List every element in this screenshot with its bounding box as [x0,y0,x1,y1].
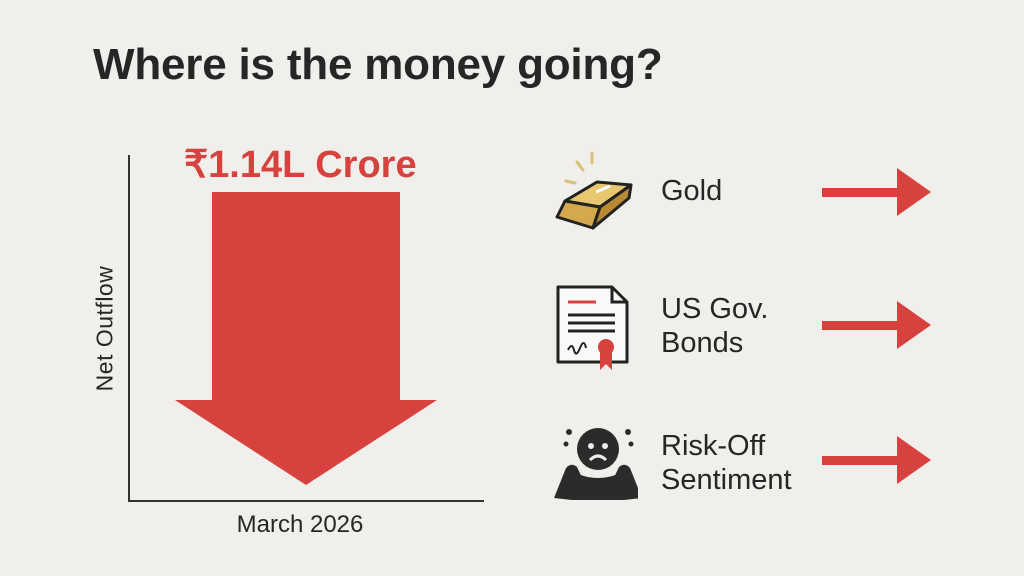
arrow: risk-off [822,436,931,484]
x axis label: March 2026 [237,511,363,538]
value label: ₹1.14L Crore [184,144,417,186]
label: US Gov. Bonds: Bonds [661,327,743,359]
title: Where is the money going? [93,40,662,89]
label: Risk-Off Sentiment: Sentiment [661,464,792,496]
label: US Gov. Bonds: US Gov. [661,293,768,325]
icon: worried person [554,428,638,500]
label: US Gov. Bonds [661,293,768,359]
row: gold [556,152,931,230]
arrow: gold [822,168,931,216]
chart: net outflow [92,144,484,538]
row: risk-off [554,428,931,500]
arrow: down [175,192,437,485]
y axis label: Net Outflow [92,266,118,391]
arrow: bonds [822,301,931,349]
icon: bond certificate [556,286,628,370]
icon: gold bar [556,152,632,230]
label: Risk-Off Sentiment [661,430,792,496]
label: Risk-Off Sentiment: Risk-Off [661,430,765,462]
label: gold: Gold [661,175,722,207]
row: US bonds [556,286,931,370]
